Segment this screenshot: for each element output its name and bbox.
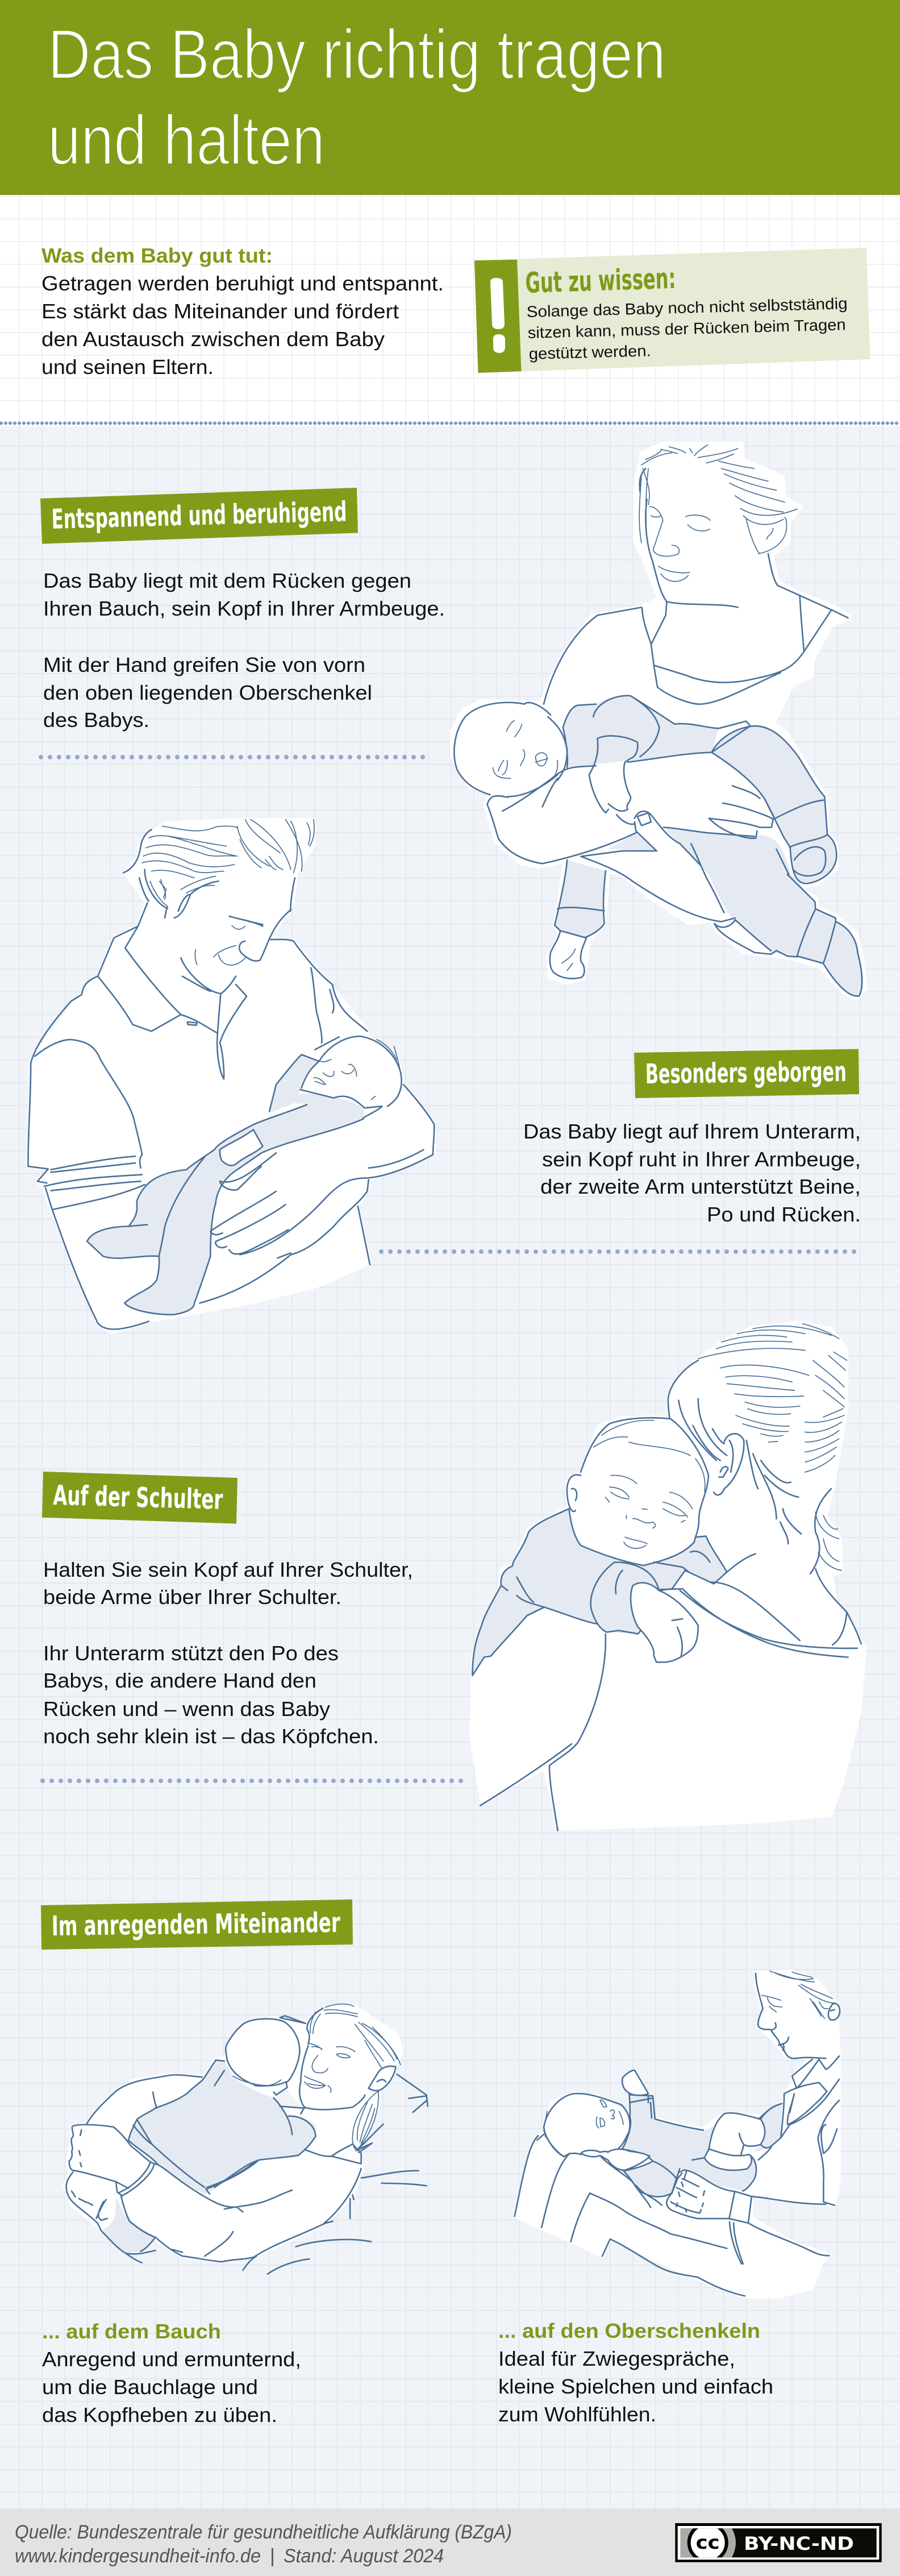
- callout: Gut zu wissen: sitzen kann, muss der Rücken beim Tragen: [527, 315, 846, 342]
- icon: cc logo: cc: [696, 2532, 720, 2553]
- text: auf den Oberschenkeln: kleine Spielchen und einfach: [498, 2375, 773, 2398]
- licence badge: BY-NC-ND: [744, 2533, 854, 2554]
- text: Auf der Schulter: [43, 1558, 413, 1748]
- baby: [269, 1036, 402, 1118]
- baby head: [226, 2019, 299, 2095]
- heading: Im anregenden Miteinander: Im anregenden Miteinander: [51, 1907, 341, 1942]
- text: Auf der Schulter: Rücken und – wenn das Baby: [43, 1697, 330, 1721]
- licence badge: [675, 2523, 882, 2562]
- source text: Stand: August 2024: [284, 2545, 444, 2567]
- source text: [15, 2521, 512, 2567]
- text: Auf der Schulter: Babys, die andere Hand den: [43, 1669, 316, 1692]
- mother lap: [515, 2133, 829, 2296]
- source text: Quelle: Bundeszentrale für gesundheitliche Aufklärung (BZgA): [15, 2521, 512, 2543]
- title: und halten: [48, 102, 325, 180]
- baby hand: [631, 1582, 698, 1662]
- intro text block: und seinen Eltern.: [41, 355, 214, 379]
- heading: Auf der Schulter: Auf der Schulter: [53, 1480, 224, 1516]
- heading: Entspannend und beruhigend: [40, 488, 358, 544]
- text: auf den Oberschenkeln: ... auf den Oberschenkeln: [498, 2319, 760, 2342]
- intro text block: [41, 244, 444, 379]
- text: Besonders geborgen: [523, 1120, 861, 1226]
- baby arm and mother hand: [563, 696, 750, 767]
- text: Besonders geborgen: der zweite Arm unterstützt Beine,: [540, 1175, 861, 1198]
- text: Entspannend: Mit der Hand greifen Sie von vorn: [43, 653, 365, 676]
- text: Besonders geborgen: Po und Rücken.: [707, 1203, 861, 1226]
- mother ear: [714, 1434, 744, 1495]
- baby head: [544, 2093, 630, 2157]
- hair: [639, 445, 797, 543]
- mother head: [756, 1973, 826, 2059]
- illustration: mother holding baby on forearm: [452, 443, 866, 1000]
- text: auf den Oberschenkeln: zum Wohlfühlen.: [498, 2403, 656, 2426]
- illustration: baby on shoulder: [471, 1322, 865, 1831]
- text: auf dem Bauch: das Kopfheben zu üben.: [42, 2403, 277, 2427]
- text: Entspannend: [43, 569, 445, 732]
- mother hair and back: [668, 1360, 861, 1645]
- callout: Gut zu wissen: [474, 248, 870, 373]
- hair: [123, 829, 295, 918]
- baby sleeve lines: [472, 1509, 727, 1676]
- heading: Besonders geborgen: [634, 1049, 859, 1098]
- callout: Gut zu wissen: Gut zu wissen:: [525, 262, 676, 300]
- text: auf dem Bauch: Anregend und ermunternd,: [42, 2348, 301, 2371]
- text: Besonders geborgen: Das Baby liegt auf Ihrem Unterarm,: [523, 1120, 861, 1143]
- ponytail: [352, 2091, 378, 2151]
- mother shoulder and strap: [480, 1554, 857, 1831]
- baby raised leg: [709, 2113, 765, 2155]
- text: auf dem Bauch: ... auf dem Bauch: [42, 2320, 221, 2343]
- father arm and hand: [199, 1085, 434, 1303]
- text: Auf der Schulter: Halten Sie sein Kopf auf Ihrer Schulter,: [43, 1558, 413, 1581]
- title: [48, 16, 666, 180]
- illustration: baby on the belly: [64, 2004, 428, 2274]
- illustration: baby on the thighs: [515, 1971, 840, 2297]
- mother hand and cuff: [666, 2170, 826, 2223]
- mother face and hair: [280, 2008, 365, 2114]
- mother collar and torso: [759, 2056, 839, 2205]
- baby head: [567, 1418, 709, 1565]
- text: auf dem Bauch: [42, 2320, 301, 2427]
- text: Entspannend: Das Baby liegt mit dem Rücken gegen: [43, 569, 411, 592]
- mother arms: [66, 2075, 361, 2270]
- heading: Auf der Schulter: [42, 1472, 238, 1524]
- baby body: [622, 2093, 703, 2149]
- body outline: [28, 903, 247, 1166]
- icon: cc logo: [688, 2528, 728, 2558]
- source text: |: [270, 2545, 275, 2567]
- baby legs: [712, 726, 836, 883]
- baby head: [454, 703, 567, 796]
- intro text block: Was dem Baby gut tut:: [41, 244, 273, 267]
- text: Besonders geborgen: sein Kopf ruht in Ihrer Armbeuge,: [542, 1148, 861, 1171]
- text: Entspannend: den oben liegenden Oberschenkel: [43, 681, 372, 704]
- text: Auf der Schulter: beide Arme über Ihrer Schulter.: [43, 1585, 341, 1609]
- text: Auf der Schulter: noch sehr klein ist – das Köpfchen.: [43, 1725, 379, 1748]
- callout: Gut zu wissen: Solange das Baby noch nicht selbstständig: [526, 294, 848, 321]
- title banner: [0, 0, 900, 195]
- illustration: father cradling baby: [28, 820, 434, 1333]
- baby lower hand and arm: [622, 2149, 680, 2197]
- text: Auf der Schulter: Ihr Unterarm stützt den Po des: [43, 1642, 339, 1665]
- text: auf den Oberschenkeln: Ideal für Zwiegespräche,: [498, 2347, 735, 2370]
- title: Das Baby richtig tragen: [48, 16, 666, 94]
- text: Entspannend: des Babys.: [43, 708, 149, 732]
- footer: [0, 2508, 900, 2576]
- text: Entspannend: Ihren Bauch, sein Kopf in Ihrer Armbeuge.: [43, 597, 445, 620]
- source text: www.kindergesundheit-info.de: [15, 2545, 261, 2567]
- intro text block: Es stärkt das Miteinander und fördert: [41, 300, 399, 323]
- intro text block: den Austausch zwischen dem Baby: [41, 327, 385, 351]
- callout: Gut zu wissen: gestützt werden.: [528, 342, 651, 363]
- icon: exclamation mark: [490, 278, 505, 353]
- text: auf dem Bauch: um die Bauchlage und: [42, 2375, 258, 2399]
- heading: Entspannend und beruhigend: Entspannend und beruhigend: [51, 496, 347, 535]
- heading: Im anregenden Miteinander: [41, 1900, 353, 1950]
- text: auf den Oberschenkeln: [498, 2319, 773, 2426]
- intro text block: Getragen werden beruhigt und entspannt.: [41, 272, 444, 295]
- baby back outline: [128, 2060, 361, 2194]
